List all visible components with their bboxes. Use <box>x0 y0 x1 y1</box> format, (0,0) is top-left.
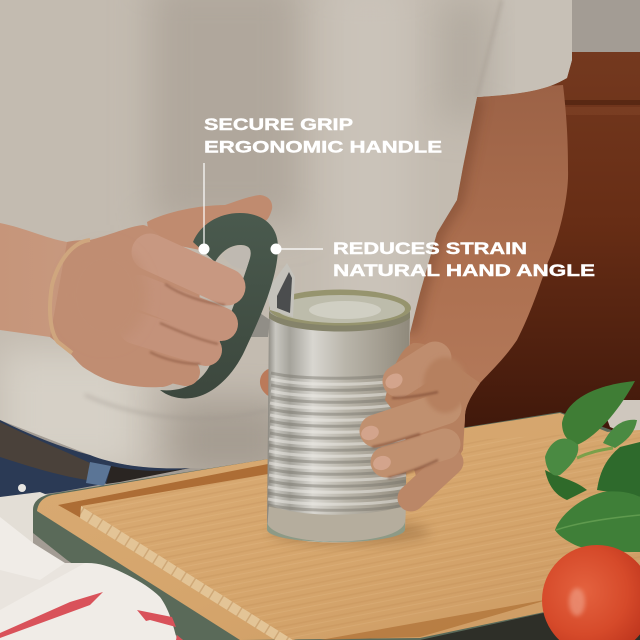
index finger <box>399 358 435 381</box>
pinky <box>120 358 186 372</box>
cutting board <box>33 412 640 640</box>
jeans and belt <box>0 420 190 500</box>
ring finger <box>386 444 445 462</box>
right arm <box>400 85 568 455</box>
opener cutting head <box>250 263 295 337</box>
sleeve <box>479 60 572 97</box>
pinky <box>411 462 450 498</box>
left hand fist <box>50 225 227 387</box>
heading: reduces strain: REDUCES STRAIN <box>333 239 527 258</box>
bracelet <box>50 240 90 353</box>
can opener handle <box>160 213 278 398</box>
ring finger <box>135 328 206 350</box>
index finger <box>150 252 227 287</box>
handle opening interior <box>222 246 250 270</box>
t-shirt <box>0 0 572 468</box>
middle finger <box>140 292 221 324</box>
counter <box>0 492 100 640</box>
wood cabinet <box>400 52 640 432</box>
callout: reduces strain <box>270 239 595 280</box>
subheading: ergonomic handle: ERGONOMIC HANDLE <box>204 138 442 156</box>
heading: secure grip: SECURE GRIP <box>204 115 353 134</box>
left forearm <box>0 223 95 347</box>
right hand on can <box>359 343 480 498</box>
tin can <box>267 290 411 542</box>
subheading: natural hand angle: NATURAL HAND ANGLE <box>333 261 595 280</box>
kitchen towel <box>0 517 183 640</box>
basil leaves <box>545 381 640 552</box>
thumb <box>147 195 272 250</box>
finger behind can <box>260 368 272 398</box>
middle finger <box>376 408 445 431</box>
callout: secure grip <box>198 115 442 254</box>
shadow under can <box>270 520 430 544</box>
tomato <box>542 545 640 640</box>
